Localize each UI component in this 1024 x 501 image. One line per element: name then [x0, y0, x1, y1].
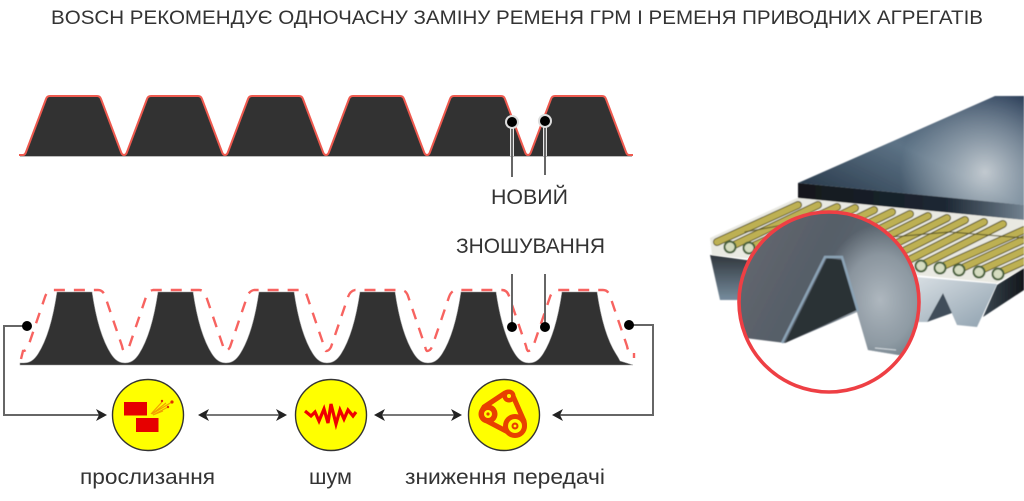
top face dark edge — [798, 183, 1024, 220]
label: noise: шум — [309, 466, 352, 489]
leader lines: wear — [507, 274, 550, 332]
icon: slip — [112, 380, 184, 450]
connector: left dot to slip icon — [4, 321, 107, 421]
top face — [798, 96, 1024, 205]
worn groove — [785, 258, 857, 343]
label: reduced transmission: зниження передачі — [405, 466, 605, 489]
belt illustration — [710, 96, 1024, 327]
label: new: НОВИЙ — [491, 185, 568, 209]
rib groove — [927, 293, 952, 322]
ribbed underside front — [710, 255, 760, 300]
original profile dashed — [21, 290, 634, 359]
magnifier lens — [737, 210, 921, 394]
label: wear: ЗНОШУВАННЯ — [456, 235, 605, 258]
cords — [717, 205, 1024, 274]
cord layer — [710, 198, 1024, 283]
arrow: noise to transmission — [374, 409, 462, 421]
icon: transmission belt — [468, 380, 540, 450]
label: slip: прослизання — [80, 466, 215, 489]
cord ends — [724, 242, 1004, 280]
icon: noise — [296, 380, 366, 450]
new belt profile — [19, 96, 633, 156]
rib highlight — [905, 276, 997, 327]
title: BOSCH РЕКОМЕНДУЄ ОДНОЧАСНУ ЗАМІНУ РЕМЕНЯ ГРМ І РЕМЕНЯ ПРИВОДНИХ АГРЕГАТІВ — [51, 8, 983, 29]
arrow: slip to noise — [198, 409, 287, 421]
leader lines: new — [505, 114, 552, 177]
connector: right dot to transmission icon — [552, 320, 653, 421]
rib side — [983, 268, 1024, 317]
worn belt profile — [20, 290, 634, 365]
